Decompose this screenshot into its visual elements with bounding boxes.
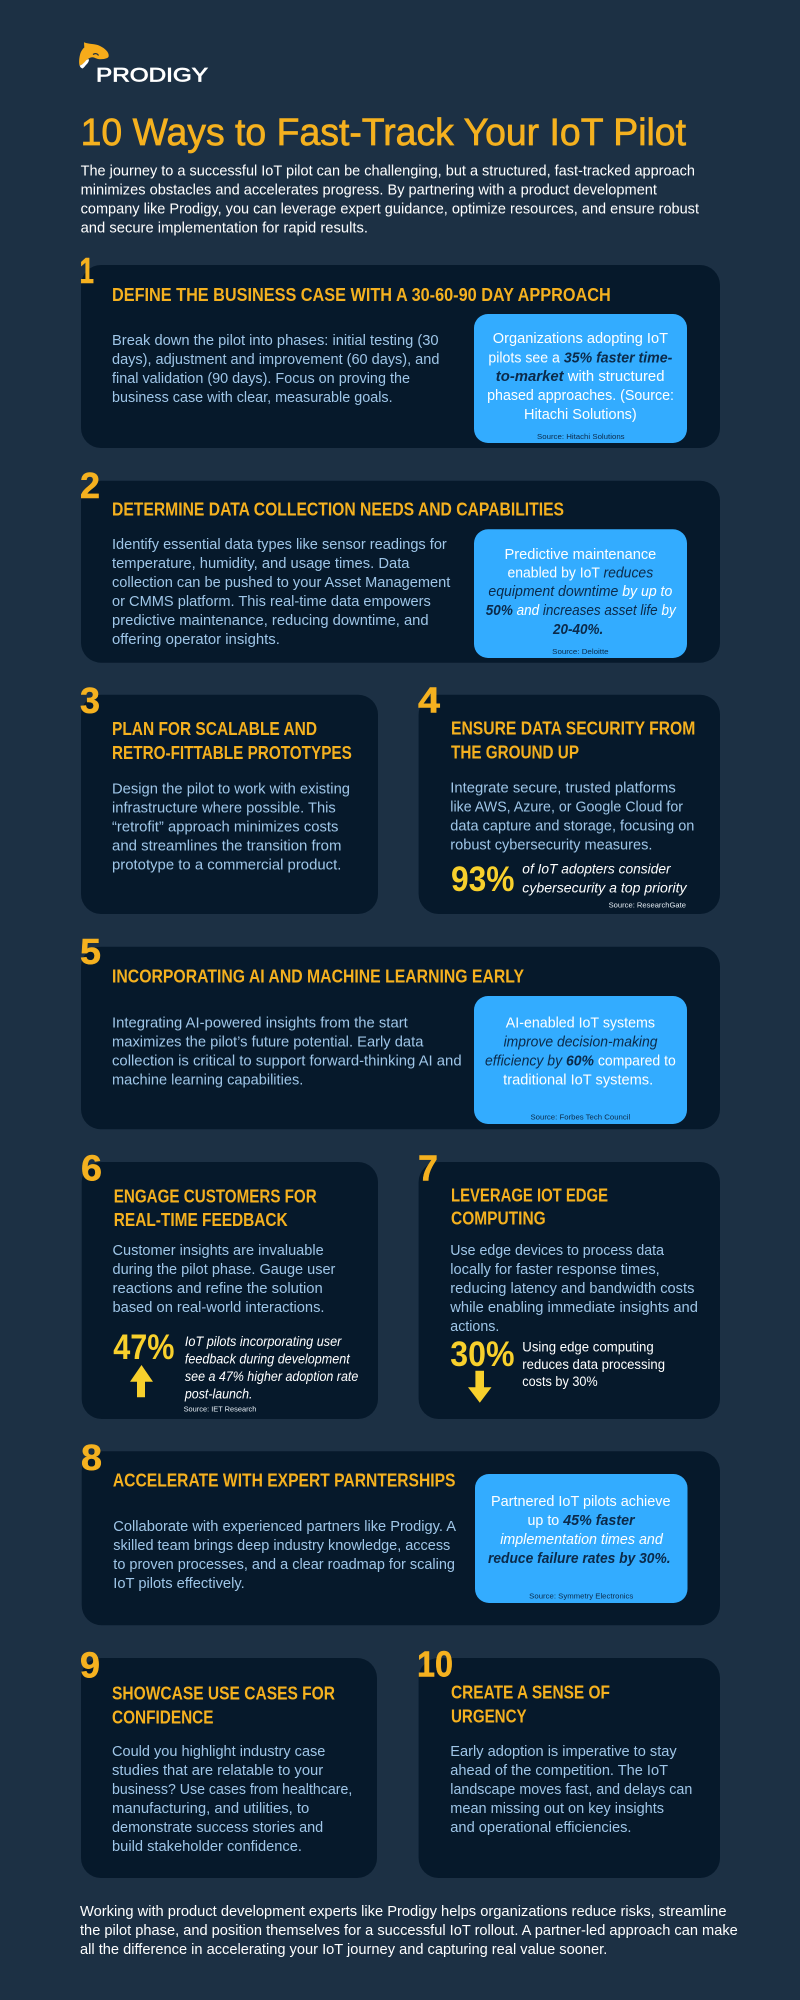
callout 2: equipment downtime by up to	[488, 584, 672, 600]
arrow down	[468, 1371, 492, 1403]
callout 5: traditional IoT systems.	[503, 1072, 653, 1088]
panel: step 5	[80, 931, 720, 1129]
callout 8: implementation times and	[500, 1532, 664, 1548]
body 7: locally for faster response times,	[450, 1262, 660, 1278]
number 4: 4	[418, 680, 441, 721]
heading 4: THE GROUND UP	[451, 742, 579, 762]
callout 2	[474, 529, 687, 658]
body 10: Early adoption is imperative to stay	[450, 1744, 677, 1760]
body 3: “retrofit” approach minimizes costs	[112, 819, 338, 835]
stat caption 47%: feedback during development	[185, 1351, 351, 1366]
intro paragraph: minimizes obstacles and accelerates progress. By partnering with a product development	[81, 183, 657, 199]
callout 5: AI-enabled IoT systems	[506, 1015, 655, 1031]
body 6: during the pilot phase. Gauge user	[112, 1262, 336, 1278]
body 5: machine learning capabilities.	[112, 1072, 303, 1088]
body 10: and operational efficiencies.	[450, 1820, 632, 1836]
body 7	[449, 1243, 698, 1335]
body 10: landscape moves fast, and delays can	[450, 1782, 692, 1798]
body 2: or CMMS platform. This real-time data empowers	[112, 594, 431, 610]
heading 6	[114, 1187, 317, 1230]
intro paragraph: The journey to a successful IoT pilot can be challenging, but a structured, fast-tracked approach	[81, 164, 695, 180]
body 3: prototype to a commercial product.	[112, 857, 341, 873]
closing paragraph	[80, 1904, 738, 1958]
callout 5: improve decision-making	[504, 1034, 658, 1050]
stat caption 93%	[522, 861, 688, 895]
body 3	[112, 781, 350, 873]
body 1	[112, 333, 439, 406]
body 7: reducing latency and bandwidth costs	[450, 1281, 694, 1297]
stat caption 47%: post-launch.	[184, 1386, 252, 1401]
body 2: collection can be pushed to your Asset Management	[112, 575, 450, 591]
heading 4	[451, 718, 695, 762]
callout 1: Source: Hitachi Solutions	[537, 432, 625, 441]
body 9: demonstrate success stories and	[112, 1820, 323, 1836]
callout 1	[474, 314, 687, 443]
callout 2: Source: Deloitte	[552, 647, 609, 656]
stat caption 30%: reduces data processing	[522, 1357, 665, 1372]
heading 7: COMPUTING	[451, 1209, 546, 1229]
heading 9: CONFIDENCE	[112, 1707, 214, 1727]
body 7: actions.	[450, 1319, 499, 1335]
body 3: and streamlines the transition from	[112, 838, 341, 854]
stat caption 93%: cybersecurity a top priority	[522, 880, 688, 895]
logo: Prodigy	[79, 42, 208, 87]
body 7: while enabling immediate insights and	[449, 1300, 698, 1316]
callout 8: Partnered IoT pilots achieve	[491, 1494, 670, 1510]
stat caption 47%: IoT pilots incorporating user	[185, 1334, 342, 1349]
stat caption 30%: Using edge computing	[522, 1339, 654, 1354]
stat caption 47%	[184, 1334, 358, 1401]
heading 10: CREATE A SENSE OF	[451, 1682, 610, 1702]
callout 2: Predictive maintenance	[504, 547, 656, 563]
heading 7: LEVERAGE IOT EDGE	[451, 1186, 608, 1206]
body 10: ahead of the competition. The IoT	[450, 1763, 668, 1779]
callout 5	[474, 996, 687, 1124]
body 9: Could you highlight industry case	[112, 1744, 325, 1760]
body 8: IoT pilots effectively.	[113, 1576, 245, 1592]
stat caption 93%: of IoT adopters consider	[522, 861, 671, 876]
callout 1: to-market with structured	[496, 369, 664, 385]
callout 8: reduce failure rates by 30%.	[488, 1551, 671, 1567]
body 9	[112, 1744, 352, 1855]
number 6: 6	[81, 1148, 102, 1189]
body 9: studies that are relatable to your	[112, 1763, 323, 1779]
panel: step 3	[80, 680, 378, 914]
heading 3: RETRO-FITTABLE PROTOTYPES	[112, 743, 352, 763]
stat caption 47%: see a 47% higher adoption rate	[185, 1369, 358, 1384]
closing paragraph: Working with product development experts like Prodigy helps organizations reduce risks, streamline	[80, 1904, 726, 1920]
body 4: like AWS, Azure, or Google Cloud for	[450, 799, 683, 815]
heading 9	[112, 1683, 335, 1727]
body 8: Collaborate with experienced partners like Prodigy. A	[113, 1519, 456, 1535]
callout 8: Source: Symmetry Electronics	[529, 1592, 634, 1601]
body 3: infrastructure where possible. This	[112, 800, 336, 816]
callout 8	[475, 1474, 688, 1603]
body 1: final validation (90 days). Focus on proving the	[112, 371, 410, 387]
intro paragraph: company like Prodigy, you can leverage expert guidance, optimize resources, and ensure robust	[81, 202, 699, 218]
panel: step 4	[418, 680, 720, 914]
body 2	[112, 537, 450, 648]
number 3: 3	[80, 680, 100, 721]
body 4	[450, 780, 694, 853]
body 6: based on real-world interactions.	[112, 1300, 324, 1316]
stat 93%: 93%	[451, 860, 514, 899]
stat 30%: 30%	[450, 1335, 514, 1374]
panel: step 8	[81, 1437, 720, 1625]
number 9: 9	[80, 1645, 100, 1686]
callout 1: pilots see a 35% faster time-	[488, 351, 672, 367]
wordmark: PRODIGY	[96, 65, 208, 87]
number 7: 7	[418, 1148, 438, 1189]
body 8	[113, 1519, 456, 1592]
number 2: 2	[80, 465, 100, 506]
body 5: maximizes the pilot’s future potential. Early data	[112, 1034, 424, 1050]
heading 4: ENSURE DATA SECURITY FROM	[451, 718, 695, 738]
body 2: temperature, humidity, and usage times. Data	[112, 556, 410, 572]
callout 5: efficiency by 60% compared to	[485, 1053, 676, 1069]
body 1: days), adjustment and improvement (60 days), and	[112, 352, 439, 368]
heading 10	[451, 1682, 610, 1726]
body 6	[112, 1243, 336, 1316]
callout 8: up to 45% faster	[528, 1513, 636, 1529]
body 1: business case with clear, measurable goals.	[112, 390, 393, 406]
stat 47%: 47%	[113, 1328, 174, 1367]
heading 8: ACCELERATE WITH EXPERT PARNTERSHIPS	[113, 1471, 456, 1491]
body 6: reactions and refine the solution	[112, 1281, 323, 1297]
callout 2: enabled by IoT reduces	[508, 565, 653, 581]
body 8: to proven processes, and a clear roadmap for scaling	[113, 1557, 455, 1573]
body 2: predictive maintenance, reducing downtime, and	[112, 613, 429, 629]
panel: step 6	[81, 1148, 378, 1419]
heading 7	[451, 1186, 608, 1229]
body 10	[450, 1744, 692, 1836]
callout 5: Source: Forbes Tech Council	[530, 1112, 631, 1121]
body 2: offering operator insights.	[112, 632, 280, 648]
closing paragraph: all the difference in accelerating your IoT journey and capturing real value sooner.	[80, 1942, 607, 1958]
heading 5: INCORPORATING AI AND MACHINE LEARNING EARLY	[112, 967, 524, 987]
body 9: build stakeholder confidence.	[112, 1839, 302, 1855]
callout 1: Organizations adopting IoT	[493, 331, 668, 347]
heading 10: URGENCY	[451, 1706, 527, 1726]
body 5: collection is critical to support forward-thinking AI and	[112, 1053, 462, 1069]
callout 1: Hitachi Solutions)	[524, 407, 637, 423]
body 5: Integrating AI-powered insights from the start	[112, 1015, 408, 1031]
heading 6: REAL-TIME FEEDBACK	[114, 1210, 288, 1230]
heading 1: DEFINE THE BUSINESS CASE WITH A 30-60-90 DAY APPROACH	[112, 285, 611, 305]
number 1: 1	[80, 250, 94, 291]
panel: step 2	[80, 465, 720, 663]
body 4: Integrate secure, trusted platforms	[450, 780, 676, 796]
body 7: Use edge devices to process data	[450, 1243, 665, 1259]
callout 2: 20-40%.	[552, 622, 603, 638]
body 3: Design the pilot to work with existing	[112, 781, 350, 797]
intro paragraph: and secure implementation for rapid results.	[81, 221, 368, 237]
intro paragraph	[81, 164, 699, 237]
closing paragraph: the pilot phase, and position themselves for a successful IoT rollout. A partner-led approach can make	[80, 1923, 738, 1939]
heading 3: PLAN FOR SCALABLE AND	[112, 719, 317, 739]
callout 2: 50% and increases asset life by	[486, 603, 676, 619]
body 6: Customer insights are invaluable	[112, 1243, 324, 1259]
body 9: business? Use cases from healthcare,	[112, 1782, 352, 1798]
number 5: 5	[80, 931, 101, 972]
panel: step 1	[80, 250, 720, 448]
icon: fox head	[79, 42, 109, 68]
stat caption 30%: costs by 30%	[522, 1374, 598, 1389]
number 10: 10	[417, 1644, 453, 1685]
heading 2: DETERMINE DATA COLLECTION NEEDS AND CAPABILITIES	[112, 500, 564, 520]
source 6: Source: IET Research	[184, 1405, 256, 1414]
body 5	[112, 1015, 462, 1088]
source 4: Source: ResearchGate	[609, 901, 686, 910]
callout 1: phased approaches. (Source:	[487, 388, 674, 404]
stat caption 30%	[522, 1339, 665, 1389]
body 4: robust cybersecurity measures.	[450, 837, 652, 853]
arrow up	[130, 1365, 153, 1397]
body 1: Break down the pilot into phases: initial testing (30	[112, 333, 439, 349]
body 4: data capture and storage, focusing on	[450, 818, 694, 834]
body 10: mean missing out on key insights	[450, 1801, 664, 1817]
panel: step 7	[418, 1148, 720, 1419]
body 2: Identify essential data types like sensor readings for	[112, 537, 447, 553]
heading 6: ENGAGE CUSTOMERS FOR	[114, 1187, 317, 1207]
body 8: skilled team brings deep industry knowledge, access	[113, 1538, 450, 1554]
panel: step 9	[80, 1645, 377, 1878]
panel: step 10	[417, 1644, 720, 1878]
number 8: 8	[81, 1437, 102, 1478]
heading 9: SHOWCASE USE CASES FOR	[112, 1683, 335, 1703]
title: 10 Ways to Fast-Track Your IoT Pilot	[81, 112, 686, 154]
body 9: manufacturing, and utilities, to	[112, 1801, 309, 1817]
heading 3	[112, 719, 352, 763]
